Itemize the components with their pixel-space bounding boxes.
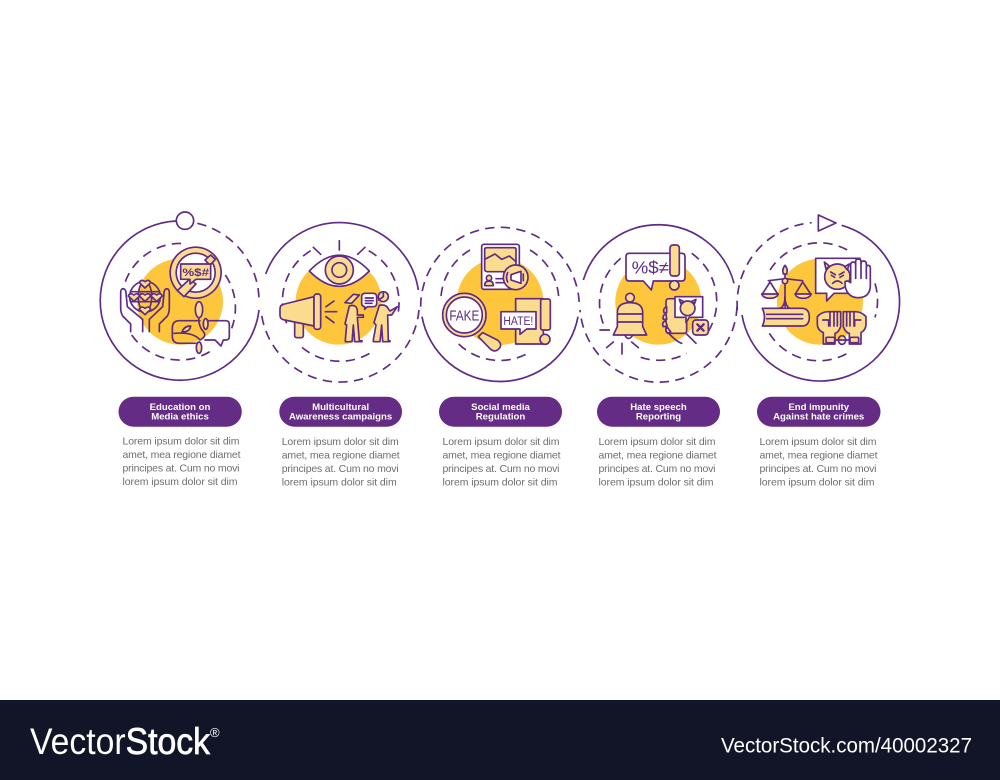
text block: hate speech: Lorem ipsum dolor sit dim xyxy=(598,436,716,448)
pill heading: hate speech: Hate speech xyxy=(630,402,687,413)
text block: multicultural: lorem ipsum dolor sit dim xyxy=(282,476,397,488)
text block: social media xyxy=(442,436,561,488)
pill heading: end impunity: Against hate crimes xyxy=(773,412,864,422)
icon: bell xyxy=(600,293,647,354)
text block: social media: Lorem ipsum dolor sit dim xyxy=(442,436,560,448)
icon: chained fists xyxy=(817,312,866,344)
icon: scales on law book xyxy=(762,265,811,326)
icon: phone with hate post xyxy=(663,297,708,343)
outer ring dashed arc xyxy=(197,223,259,300)
end marker triangle xyxy=(818,215,836,231)
yellow disc xyxy=(457,258,543,345)
footer bar xyxy=(0,700,1000,780)
logo wordmark: VectorStock xyxy=(30,721,210,762)
outer ring dashed arc xyxy=(261,310,419,382)
pill heading: education: Media ethics xyxy=(151,412,209,422)
outer ring solid arc xyxy=(100,221,259,380)
pill heading: multicultural: Multicultural xyxy=(312,402,369,413)
yellow disc xyxy=(296,259,382,345)
panel: end impunity circle xyxy=(737,215,900,381)
text block: multicultural: Lorem ipsum dolor sit dim xyxy=(282,436,399,448)
icon: document with hate bubble: HATE! xyxy=(503,314,533,328)
pill heading: multicultural: Awareness campaigns xyxy=(289,412,392,422)
outer ring dashed arc xyxy=(737,223,812,310)
text block: hate speech: amet, mea regione diamet xyxy=(598,450,717,462)
panel: multicultural awareness circle xyxy=(261,223,419,382)
icon: eye xyxy=(309,241,369,286)
pill heading: education xyxy=(118,397,242,427)
icon: banned swear speech: %$# xyxy=(182,267,209,279)
text block: hate speech: lorem ipsum dolor sit dim xyxy=(598,476,714,488)
text block: education: amet, mea regione diamet xyxy=(122,449,241,461)
text block: hate speech: principes at. Cum no movi xyxy=(598,463,716,475)
text block: end impunity: principes at. Cum no movi xyxy=(760,463,876,475)
pill heading: social media: Social media xyxy=(471,402,530,413)
text block: end impunity: Lorem ipsum dolor sit dim xyxy=(760,436,877,448)
inner dashed arcs xyxy=(282,251,399,361)
text block: end impunity: amet, mea regione diamet xyxy=(760,450,878,462)
pill heading: social media: Regulation xyxy=(476,412,525,422)
icon: angry face bubble with stop hand xyxy=(816,258,870,301)
pill heading: social media xyxy=(439,397,562,427)
outer ring solid arc xyxy=(583,225,734,283)
outer ring dashed arc xyxy=(421,227,579,307)
outer ring solid arc xyxy=(422,317,578,382)
icon: two people talking xyxy=(345,292,397,342)
text block: end impunity: lorem ipsum dolor sit dim xyxy=(760,476,875,488)
start marker circle xyxy=(176,212,194,229)
yellow disc xyxy=(137,259,223,345)
yellow disc xyxy=(615,259,701,345)
icon: banned swear speech xyxy=(169,246,222,299)
text block: social media: lorem ipsum dolor sit dim xyxy=(442,476,558,488)
image id url: VectorStock.com/40002327 xyxy=(721,734,972,758)
text block: social media: principes at. Cum no movi xyxy=(442,463,560,475)
icon: hands holding globe xyxy=(121,280,169,332)
pill heading: hate speech xyxy=(597,397,720,427)
icon: growing plant in speech bubbles xyxy=(172,302,229,353)
inner dashed arcs xyxy=(769,243,878,361)
icon: profile card with megaphone xyxy=(482,244,528,290)
panel: social media regulation circle xyxy=(421,227,579,382)
text block: multicultural: amet, mea regione diamet xyxy=(282,450,400,462)
text block: hate speech xyxy=(598,436,717,488)
icon: megaphone xyxy=(280,294,337,338)
text block: multicultural: principes at. Cum no movi xyxy=(282,463,399,475)
pill heading: multicultural xyxy=(279,397,402,427)
inner dashed arcs xyxy=(441,250,559,360)
text block: education xyxy=(122,436,241,488)
text block: education: lorem ipsum dolor sit dim xyxy=(122,476,238,488)
icon: document with hate bubble xyxy=(501,299,550,344)
pill heading: education: Education on xyxy=(150,402,211,413)
icon: swear speech bubble with exclamation: %$≠ xyxy=(632,258,669,278)
icon: magnifier with fake xyxy=(443,293,501,351)
registered mark: ® xyxy=(210,725,220,740)
text block: education: principes at. Cum no movi xyxy=(122,462,240,474)
panel: education on media ethics circle xyxy=(100,212,259,380)
pill heading: end impunity xyxy=(757,397,880,427)
inner dashed arcs xyxy=(125,243,235,360)
text block: end impunity xyxy=(760,436,878,488)
text block: multicultural xyxy=(282,436,400,488)
outer ring dashed arc xyxy=(580,307,737,382)
yellow disc xyxy=(777,259,863,345)
panel: hate speech reporting circle xyxy=(580,225,737,382)
outer ring solid arc xyxy=(266,223,418,290)
text block: education: Lorem ipsum dolor sit dim xyxy=(122,436,240,448)
outer ring solid arc xyxy=(742,225,900,381)
pill heading: hate speech: Reporting xyxy=(636,412,681,422)
pill heading: end impunity: End impunity xyxy=(788,402,850,413)
icon: magnifier with fake: FAKE xyxy=(449,308,480,324)
icon: swear speech bubble with exclamation xyxy=(626,245,685,290)
text block: social media: amet, mea regione diamet xyxy=(442,450,561,462)
inner dashed arcs xyxy=(600,253,717,360)
